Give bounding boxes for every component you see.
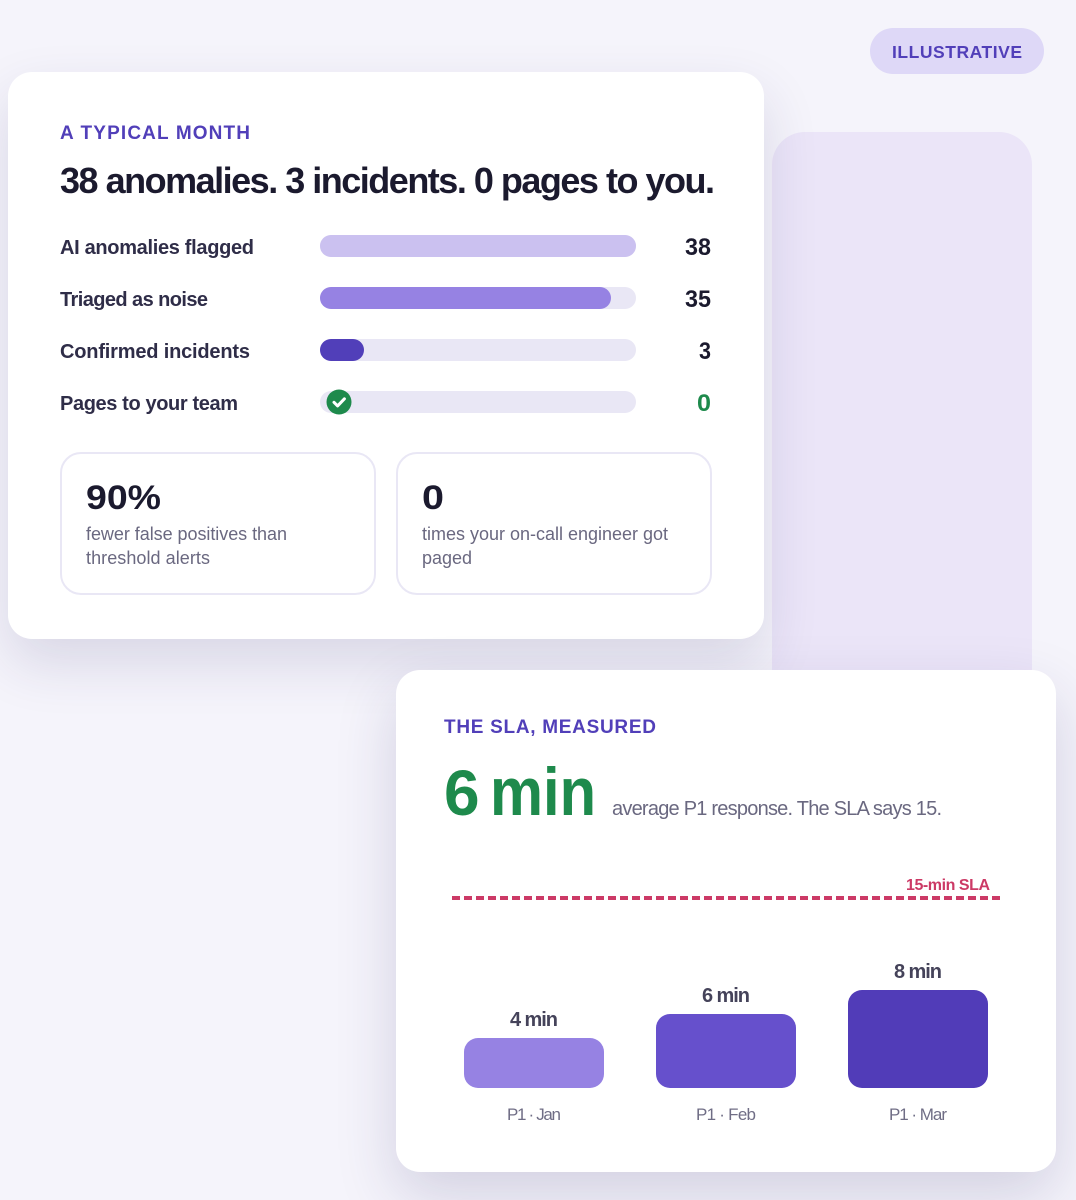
bar row: AI anomalies flagged xyxy=(60,234,711,261)
stat box: 0 xyxy=(397,453,711,594)
decorative back panel xyxy=(772,132,1032,702)
bar row: AI anomalies flagged: 38 xyxy=(685,234,711,261)
big number: 6 min: 6 xyxy=(444,757,497,829)
eyebrow: a typical month: A TYPICAL MONTH xyxy=(60,123,250,144)
bar row: pages to your team: Pages to your team xyxy=(60,393,238,415)
stat box: 0: 0 xyxy=(422,479,444,517)
SLA threshold line: 15-min SLA xyxy=(906,877,990,894)
stat box: 90%: 90% xyxy=(86,479,161,517)
bar: January: 4 min xyxy=(510,1009,558,1031)
icon: green check xyxy=(326,390,352,414)
bar: February xyxy=(656,985,796,1124)
bar: March: P1 · Mar xyxy=(889,1105,947,1124)
bar row: confirmed incidents xyxy=(60,338,711,365)
bar: March xyxy=(848,961,988,1124)
stat box: 90%: threshold alerts xyxy=(86,548,210,568)
stat box: 90% xyxy=(61,453,375,594)
bar row: triaged as noise xyxy=(60,286,711,313)
stat box: 90%: fewer false positives than xyxy=(86,524,287,544)
bar row: pages to your team: 0 xyxy=(697,390,711,417)
stat box: 0: times your on-call engineer got xyxy=(422,524,668,544)
heading: 38 anomalies. 3 incidents. 0 pages to you. xyxy=(60,160,715,201)
bar row: pages to your team xyxy=(60,390,711,417)
bar row: confirmed incidents: Confirmed incidents xyxy=(60,341,250,363)
stat box: 0: paged xyxy=(422,548,472,568)
bar row: confirmed incidents: 3 xyxy=(699,338,711,365)
panel: the SLA, measured xyxy=(396,670,1056,1172)
panel: a typical month xyxy=(8,72,764,639)
bar: February: 6 min xyxy=(702,985,750,1007)
big number: 6 min: min xyxy=(490,754,596,830)
bar: February: P1 · Feb xyxy=(696,1105,756,1124)
badge: illustrative: ILLUSTRATIVE xyxy=(892,42,1022,62)
bar: March: 8 min xyxy=(894,961,942,983)
bar row: triaged as noise: 35 xyxy=(685,286,711,313)
bar row: AI anomalies flagged: AI anomalies flagged xyxy=(60,237,254,259)
badge: illustrative xyxy=(870,28,1044,74)
bar: January xyxy=(464,1009,604,1124)
bar: January: P1 · Jan xyxy=(507,1105,561,1124)
subtitle: average P1 response. The SLA says 15. xyxy=(612,798,942,820)
eyebrow: the SLA, measured: THE SLA, MEASURED xyxy=(444,717,656,738)
bar row: triaged as noise: Triaged as noise xyxy=(60,289,208,311)
